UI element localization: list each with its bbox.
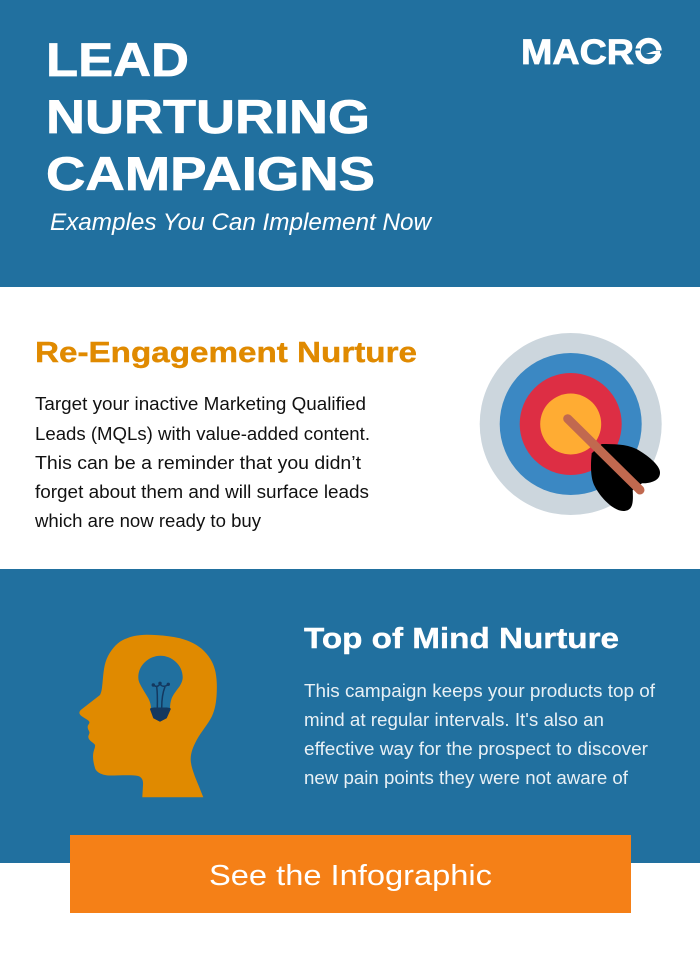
- body text: Target your inactive Marketing Qualified: [35, 394, 366, 414]
- body text: This can be a reminder that you didn’t: [35, 453, 361, 473]
- panel: re-engagement nurture: [0, 287, 700, 569]
- body text: [304, 681, 656, 788]
- body text: This campaign keeps your products top of: [304, 681, 656, 701]
- heading: Top of Mind Nurture: [304, 623, 619, 655]
- subtitle: Examples You Can Implement Now: [50, 209, 433, 236]
- call-to-action button: [70, 835, 631, 913]
- call-to-action button: See the Infographic: [209, 860, 492, 892]
- logo: MACRO: MACR: [521, 33, 634, 72]
- icon detail: bulb base and filament: [150, 682, 171, 722]
- body text: mind at regular intervals. It's also an: [304, 710, 604, 730]
- panel: header: [0, 0, 700, 287]
- heading: Re-Engagement Nurture: [35, 337, 417, 369]
- body text: new pain points they were not aware of: [304, 768, 629, 788]
- title: [46, 33, 375, 200]
- panel: top of mind nurture: [0, 569, 700, 863]
- body text: [34, 394, 370, 531]
- title: LEAD: [46, 33, 189, 86]
- icon: head with light bulb: [79, 635, 217, 797]
- body text: which are now ready to buy: [34, 511, 261, 531]
- body text: forget about them and will surface leads: [35, 482, 369, 502]
- body text: effective way for the prospect to discover: [304, 739, 648, 759]
- title: NURTURING: [46, 90, 370, 143]
- body text: Leads (MQLs) with value-added content.: [35, 424, 370, 444]
- title: CAMPAIGNS: [46, 147, 375, 200]
- icon: target with arrow: [480, 333, 662, 515]
